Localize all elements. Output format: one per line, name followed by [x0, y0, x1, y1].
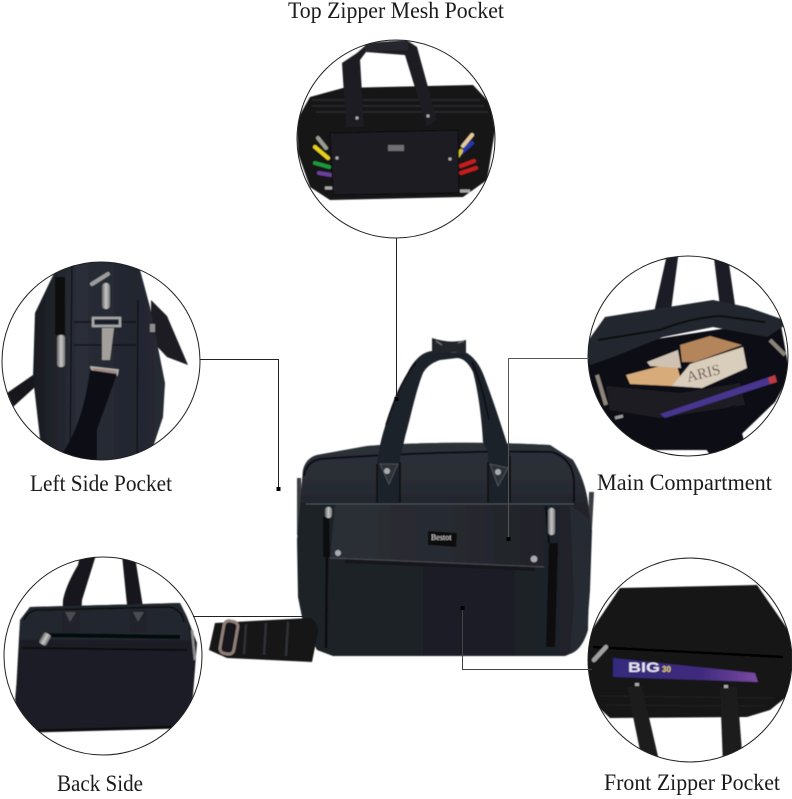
brand label [428, 531, 457, 547]
hook [93, 318, 120, 326]
pens [315, 135, 476, 175]
label box [647, 350, 681, 368]
circle detail: front zipper pocket [580, 558, 792, 765]
top flap [585, 300, 790, 365]
shoulder strap [209, 618, 318, 662]
heading: Back Side: Back Side [57, 771, 143, 796]
magazine edge [660, 375, 777, 418]
side view bag [33, 255, 165, 465]
connector: top zipper mesh pocket [394, 238, 398, 401]
top view handles [342, 41, 437, 127]
front strap [57, 370, 117, 460]
back handle bases [67, 609, 76, 610]
connector: front zipper pocket [460, 606, 592, 670]
magazine: BIG [628, 659, 660, 675]
far strap [7, 375, 35, 407]
magazine [613, 658, 758, 682]
upper tan box [680, 336, 742, 362]
brand label: Bestot [431, 533, 452, 542]
bag body [297, 443, 592, 656]
top zipper pulls [92, 274, 108, 284]
zip pull [594, 647, 606, 660]
circle detail: back side [4, 555, 202, 755]
side hardware [192, 630, 195, 660]
front lip [606, 383, 745, 418]
handles [632, 717, 659, 756]
side hardware hooks [297, 478, 594, 535]
circle detail: top zipper mesh pocket [297, 40, 495, 238]
front pocket bag [580, 585, 792, 718]
left zipper [323, 507, 332, 648]
circle detail: left side pocket [2, 255, 200, 465]
beige book with text: ARIS [685, 362, 722, 386]
dark bag base [585, 320, 790, 450]
connector: back side [193, 616, 315, 618]
handle grip [432, 338, 466, 354]
front flap [330, 505, 544, 567]
top view bag [297, 85, 495, 200]
tan box [626, 362, 681, 386]
pocket panel [330, 130, 459, 195]
back handles [62, 558, 96, 607]
flap rivet [150, 324, 155, 332]
main product photo: laptop bag [209, 338, 594, 662]
upper panel [300, 443, 588, 503]
front handle [376, 351, 510, 503]
flap rivets [335, 550, 537, 562]
bottom edge [33, 727, 180, 731]
right side panel [570, 505, 590, 654]
side flap [151, 300, 188, 365]
heading: Front Zipper Pocket: Front Zipper Pocket [604, 770, 781, 795]
back panel [15, 650, 192, 730]
heading: Left Side Pocket: Left Side Pocket [30, 471, 173, 496]
lower handles [706, 406, 744, 454]
connector: main compartment [506, 358, 589, 541]
magazine: 30 [662, 665, 671, 674]
circle detail: main compartment [585, 250, 790, 458]
heading: Main Compartment: Main Compartment [597, 470, 773, 495]
side zipper details [597, 340, 785, 405]
beige book with text [672, 347, 747, 388]
zipper pulls [325, 188, 470, 191]
handle rivets [380, 464, 508, 486]
back zipper [43, 635, 180, 637]
side zipper band [55, 277, 65, 335]
connector: left side pocket [200, 360, 280, 491]
straps [654, 256, 679, 310]
back body [15, 603, 197, 732]
right zipper [546, 506, 558, 647]
